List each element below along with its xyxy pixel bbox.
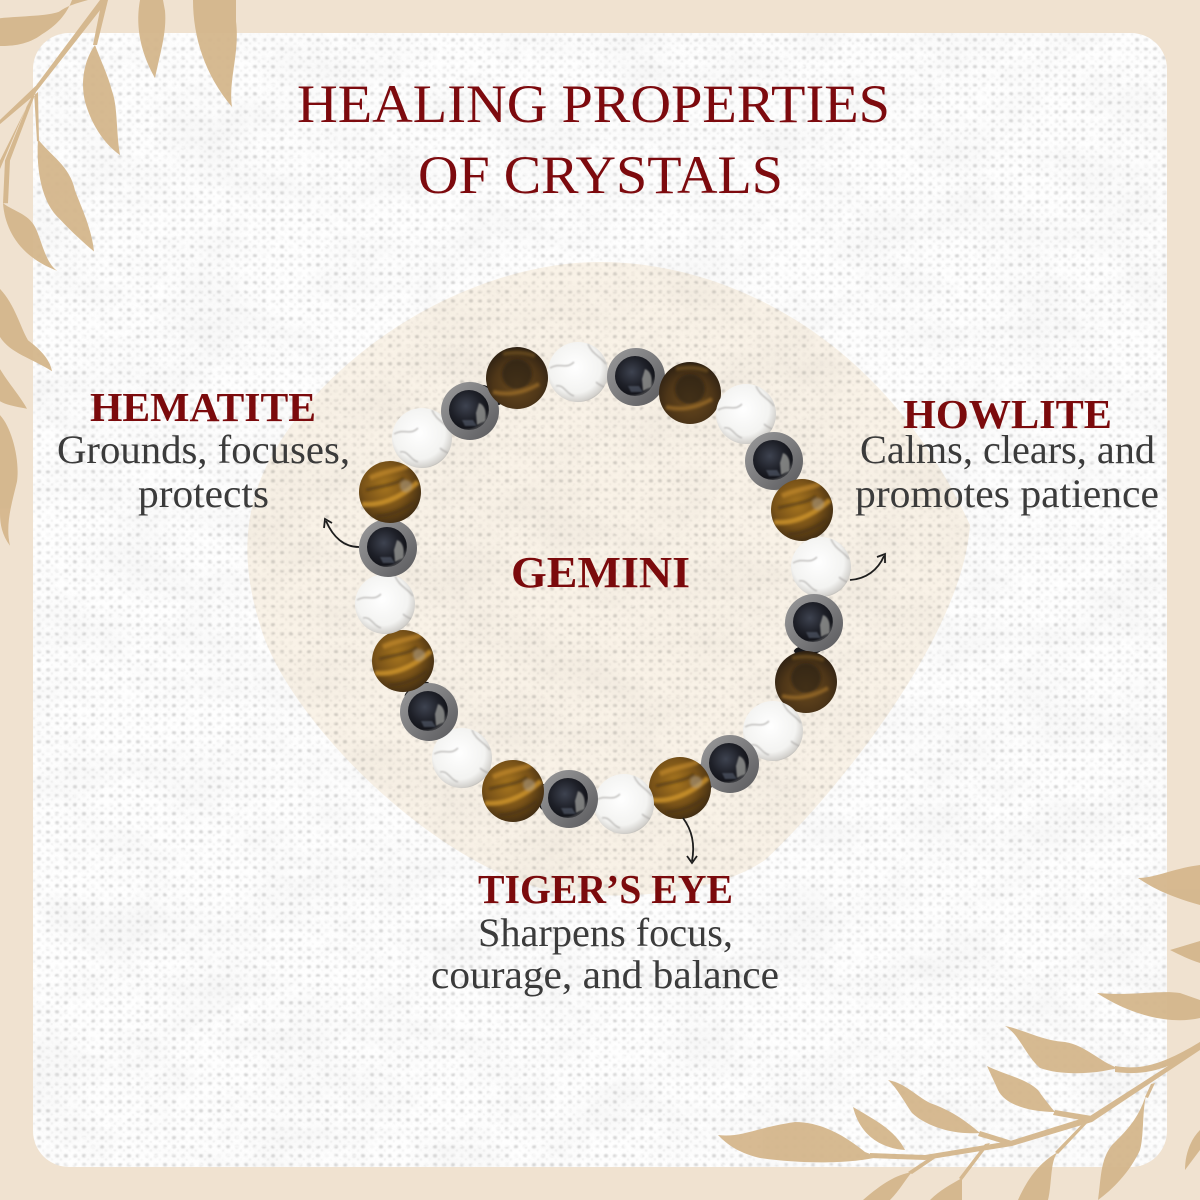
- callout: tiger's eye: Sharpens focus,: [478, 910, 733, 955]
- callout: howlite: [855, 391, 1159, 516]
- callout: howlite: promotes patience: [855, 471, 1159, 516]
- bead: tiger's eye: [372, 630, 434, 692]
- bead: tiger's eye dark: [659, 362, 721, 424]
- callout: hematite: Grounds, focuses,: [57, 427, 350, 472]
- bead: hematite: [701, 735, 759, 793]
- callout: howlite: HOWLITE: [903, 391, 1112, 437]
- title: [297, 74, 890, 205]
- center label: Gemini: GEMINI: [511, 548, 690, 597]
- bead: howlite: [548, 342, 608, 402]
- callout: tiger's eye: TIGER’S EYE: [478, 866, 733, 912]
- bead: tiger's eye dark: [775, 651, 837, 713]
- callout: hematite: [57, 384, 350, 516]
- arrow: to howlite bead: [850, 554, 885, 580]
- title: OF CRYSTALS: [418, 145, 783, 205]
- bead: howlite: [791, 537, 851, 597]
- bead: tiger's eye: [649, 757, 711, 819]
- leaves: top left: [0, 0, 237, 546]
- bead: howlite: [594, 774, 654, 834]
- bead: tiger's eye: [771, 479, 833, 541]
- bead: hematite: [785, 594, 843, 652]
- arrow: to tiger's eye bead: [683, 818, 697, 863]
- callout: hematite: HEMATITE: [90, 384, 316, 430]
- bead: tiger's eye: [359, 461, 421, 523]
- bead: hematite: [745, 432, 803, 490]
- spacer beads: [402, 370, 822, 810]
- bead: howlite: [432, 728, 492, 788]
- callout: tiger's eye: [431, 866, 779, 997]
- callout: howlite: Calms, clears, and: [860, 427, 1155, 472]
- bead: howlite: [355, 574, 415, 634]
- bead: hematite: [359, 519, 417, 577]
- bead: hematite: [441, 382, 499, 440]
- bead: tiger's eye dark: [486, 347, 548, 409]
- cream blob behind bracelet: [247, 262, 970, 895]
- bracelet: [355, 342, 851, 834]
- bead: hematite: [540, 770, 598, 828]
- bead: howlite: [743, 701, 803, 761]
- callout: tiger's eye: courage, and balance: [431, 952, 779, 997]
- title: HEALING PROPERTIES: [297, 74, 890, 134]
- bead: hematite: [607, 348, 665, 406]
- bead: hematite: [400, 683, 458, 741]
- arrow: to hematite bead: [324, 519, 359, 547]
- callout: hematite: protects: [138, 471, 269, 516]
- bead: howlite: [716, 384, 776, 444]
- leaves: bottom right: [718, 865, 1200, 1200]
- bead: tiger's eye: [482, 760, 544, 822]
- bead: howlite: [392, 408, 452, 468]
